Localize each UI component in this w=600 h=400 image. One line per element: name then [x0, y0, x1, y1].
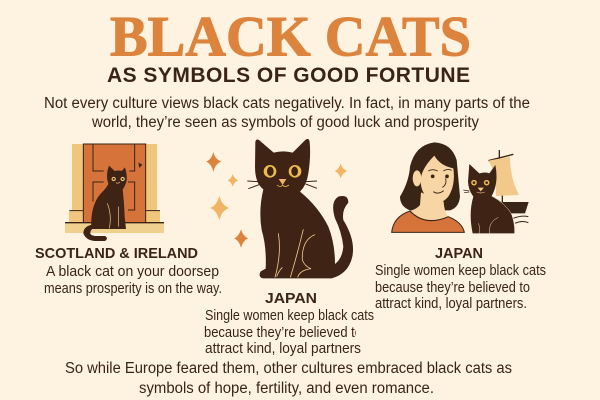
- text: Scotland and Ireland description: [44, 264, 222, 297]
- ship and cat: [463, 150, 529, 233]
- text: Japan right description: Single women keep black cats: [375, 263, 546, 279]
- closing text: symbols of hope, fertility, and even romance.: [139, 380, 434, 397]
- subtitle: AS SYMBOLS OF GOOD FORTUNE: [107, 64, 470, 87]
- text: Japan centre description: Single women keep black cats: [205, 308, 374, 324]
- illustration: sparkles: [206, 152, 347, 248]
- illustration: sitting black cat: [247, 139, 353, 278]
- intro text: world, they’re seen as symbols of good luck and prosperity: [91, 114, 479, 131]
- illustration: woman, cat and ship: [392, 142, 529, 233]
- text: Scotland and Ireland description: means prosperity is on the way.: [44, 281, 222, 297]
- title: BLACK CATS: [110, 6, 471, 68]
- intro text: Not every culture views black cats negatively. In fact, in many parts of the: [44, 95, 530, 112]
- heading: Japan centre: JAPAN: [265, 290, 317, 307]
- heading: Scotland and Ireland: SCOTLAND & IRELAND: [35, 245, 198, 262]
- illustration: cat on doorstep: [65, 144, 164, 241]
- text: Scotland and Ireland description: A black cat on your doorsep: [46, 264, 219, 280]
- text: Japan right description: because they’re believed to: [375, 280, 530, 296]
- woman: [392, 142, 464, 232]
- heading: Japan right: JAPAN: [435, 245, 483, 262]
- intro text: [44, 95, 530, 131]
- text: Japan right description: [375, 263, 546, 312]
- closing text: [65, 360, 512, 397]
- closing text: So while Europe feared them, other cultures embraced black cats as: [65, 360, 512, 377]
- text: Japan right description: attract kind, loyal partners.: [375, 296, 527, 312]
- text: Japan centre description: [204, 308, 374, 357]
- text: Japan centre description: because they’re believed to: [204, 325, 362, 341]
- text: Japan centre description: attract kind, loyal partners: [205, 341, 361, 357]
